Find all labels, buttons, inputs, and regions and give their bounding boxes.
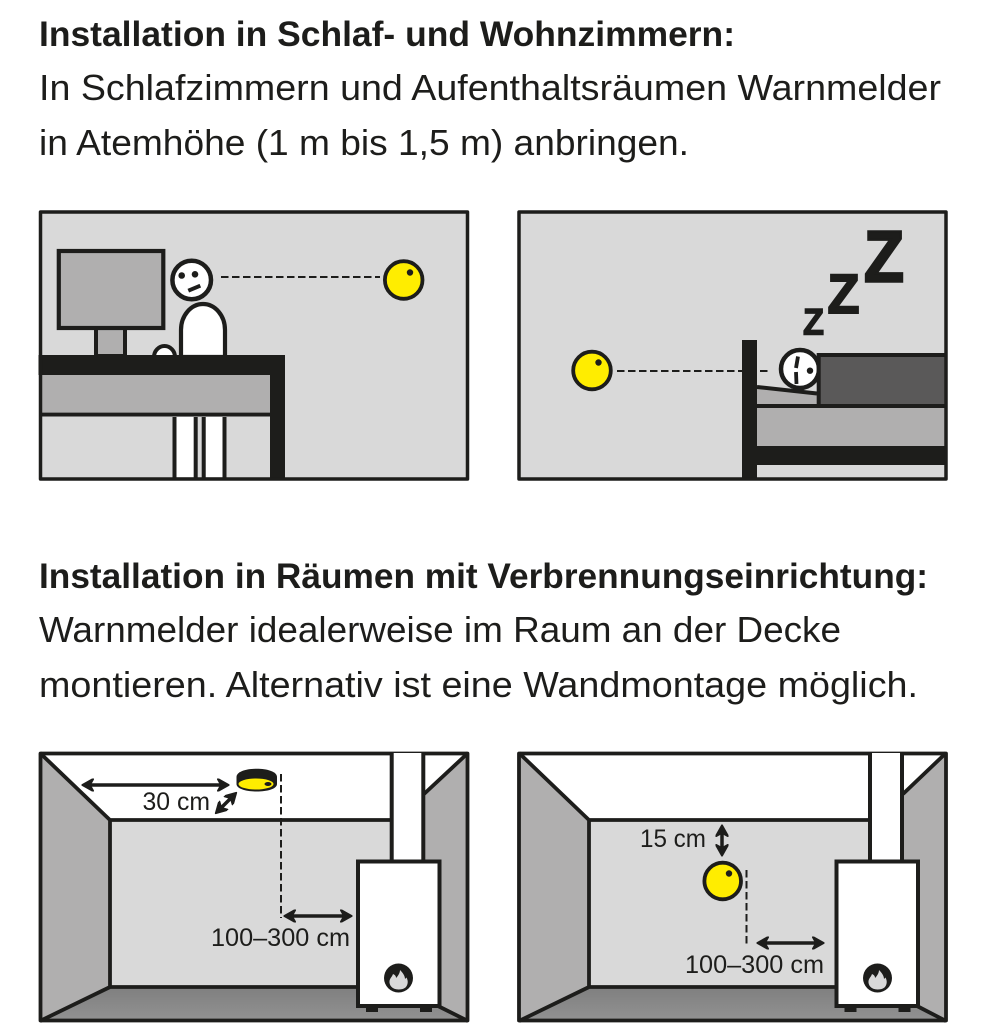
arrow: distance to stove [286,914,350,918]
arrow: 30 cm to wall [84,783,227,787]
room: walls, ceiling and floor [519,753,946,1021]
body text line 2: in Atemhöhe (1 m bis 1,5 m) anbringen. [39,122,689,163]
arrow: 30 cm to corner [217,794,235,812]
heading: combustion rooms: Installation in Räumen mit Verbrennungseinrichtung: [39,556,928,596]
room: walls, ceiling and floor [40,753,468,1021]
panel: wall mounting [519,752,946,1021]
icon: snoring letters [803,218,904,342]
icon: ceiling detector [236,769,277,792]
body text line 1: In Schlafzimmern und Aufenthaltsräumen Warnmelder [39,67,941,108]
arrow: 15 cm to ceiling [720,827,724,854]
dashed line: detector position [746,870,748,945]
label: 100–300 cm: 100–300 cm [211,924,350,952]
icon: yellow detector [573,352,611,389]
arrow: distance to stove [759,941,822,945]
icon: yellow detector [704,863,741,899]
panel: ceiling mounting [40,752,468,1021]
icon: bed with sleeping person [742,340,947,480]
label: 100–300 cm: 100–300 cm [685,951,824,979]
icon: yellow detector [385,261,423,299]
label: 15 cm: 15 cm [640,825,706,853]
panel: person sleeping in bed [519,212,947,480]
body text line 2: montieren. Alternativ ist eine Wandmontage möglich. [39,664,918,705]
heading: bedroom and living room: Installation in Schlaf- und Wohnzimmern: [39,14,735,54]
body text line 1: Warnmelder idealerweise im Raum an der Decke [39,609,841,650]
icon: snoring letters: Z [803,301,824,342]
dashed line: detector position [280,774,282,918]
icon: desk [38,355,285,480]
icon: stove with chimney [358,752,440,1012]
text block: rooms with combustion appliance [39,556,928,705]
icon: snoring letters: Z [864,218,904,298]
dashed line: breathing height [221,276,380,278]
dashed line: breathing height [617,370,771,372]
text block: bedroom and living room installation [39,14,941,163]
panel: person at desk [38,212,468,480]
label: 30 cm: 30 cm [142,788,210,816]
icon: stove with chimney [836,752,918,1012]
icon: snoring letters: Z [828,262,860,325]
icon: monitor [59,251,163,356]
icon: person [154,261,225,478]
